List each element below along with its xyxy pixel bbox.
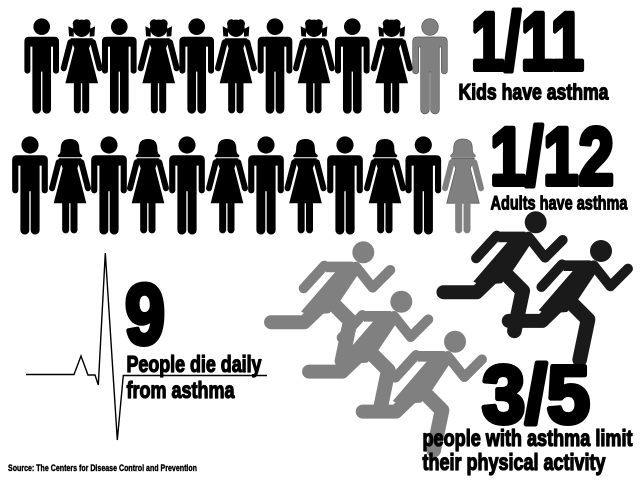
- text: from asthma: from asthma: [126, 377, 235, 403]
- panel: adults row of figures: [12, 136, 481, 235]
- icon: gray runner one: [271, 241, 390, 361]
- chart: heartbeat line: [26, 253, 267, 440]
- icon: black runner two: [509, 240, 628, 360]
- icon: black runner one: [443, 211, 563, 331]
- panel: kids row of figures: [24, 18, 447, 114]
- stat: 3/5: 3/5: [482, 350, 590, 440]
- icon: gray runner two: [309, 291, 428, 410]
- stat: 9: 9: [125, 268, 165, 362]
- text: People die daily: People die daily: [126, 351, 262, 377]
- icon: gray runner three: [363, 331, 482, 450]
- text: Kids have asthma: Kids have asthma: [458, 80, 609, 104]
- icon: gray boy highlighted: [413, 19, 447, 114]
- icon: gray woman highlighted: [445, 139, 481, 230]
- text: source: Source: The Centers for Disease Control and Prevention: [8, 463, 197, 474]
